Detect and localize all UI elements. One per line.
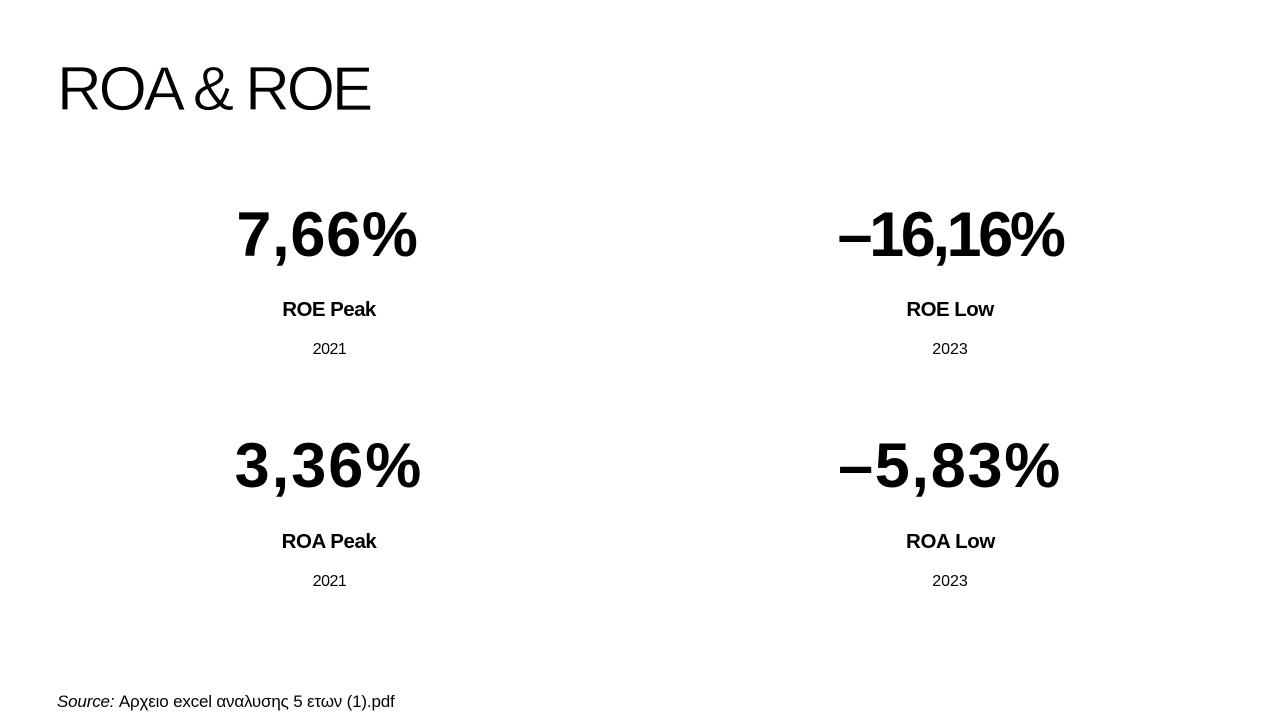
panel: ROA low xyxy=(838,430,1062,590)
ROA low label: ROA Low xyxy=(906,530,995,552)
ROA peak year: 2021 xyxy=(313,573,346,590)
ROA peak label: ROA Peak xyxy=(282,530,376,552)
ROA peak value: 3,36% xyxy=(235,430,423,500)
panel: ROE low xyxy=(838,200,1064,358)
ROA low year: 2023 xyxy=(932,573,968,590)
source note: Source: Αρχειο excel αναλυσης 5 ετων (1).pdf xyxy=(57,692,395,710)
ROE low value: –16,16% xyxy=(838,200,1062,270)
title: ROA & ROE xyxy=(57,54,370,124)
ROE low year: 2023 xyxy=(932,341,968,358)
panel: ROE peak xyxy=(236,200,419,358)
ROA low value: –5,83% xyxy=(838,430,1062,500)
ROE peak year: 2021 xyxy=(313,341,346,358)
ROE peak label: ROE Peak xyxy=(282,298,376,320)
ROE low label: ROE Low xyxy=(906,298,994,320)
ROE peak value: 7,66% xyxy=(236,200,419,270)
panel: ROA peak xyxy=(235,430,423,590)
